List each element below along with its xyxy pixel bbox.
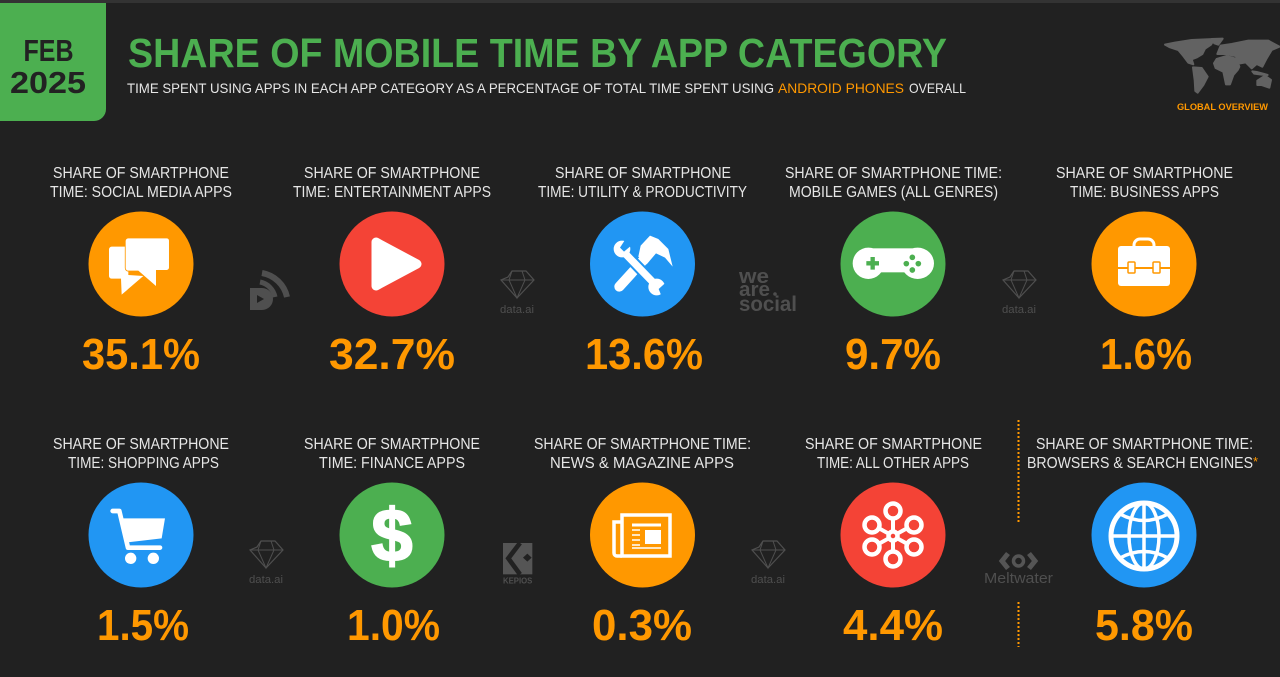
subtitle: ANDROID PHONES [778, 80, 904, 96]
category: finance: SHARE OF SMARTPHONE [304, 436, 480, 453]
category: business [1056, 165, 1233, 379]
category: business: 1.6% [1100, 330, 1192, 379]
category: utility: TIME: UTILITY & PRODUCTIVITY [538, 184, 747, 201]
category: news: 0.3% [592, 601, 692, 650]
source logo: meltwater: Meltwater [984, 570, 1053, 587]
source logo: data.ai [751, 541, 785, 586]
category: social media: SHARE OF SMARTPHONE [53, 165, 229, 182]
source logo: we are social: social [739, 293, 797, 316]
category: all other: 4.4% [843, 601, 943, 650]
world map [1165, 39, 1279, 93]
category: mobile games [785, 165, 1002, 379]
category: mobile games: 9.7% [845, 330, 941, 379]
category: shopping [53, 436, 229, 650]
category: finance: TIME: FINANCE APPS [319, 455, 465, 472]
category: browsers: 5.8% [1095, 601, 1193, 650]
source logo: rss D [250, 273, 287, 310]
category: browsers: BROWSERS & SEARCH ENGINES [1027, 455, 1253, 472]
source logo: kepios [503, 543, 533, 585]
category: entertainment: TIME: ENTERTAINMENT APPS [293, 184, 491, 201]
category: finance [304, 436, 480, 650]
source logo: data.ai: data.ai [751, 574, 785, 586]
category: business: SHARE OF SMARTPHONE [1056, 165, 1233, 182]
subtitle: TIME SPENT USING APPS IN EACH APP CATEGORY AS A PERCENTAGE OF TOTAL TIME SPENT USING [127, 80, 774, 96]
source logo: data.ai: data.ai [500, 304, 534, 316]
category: social media: TIME: SOCIAL MEDIA APPS [50, 184, 232, 201]
category: all other: TIME: ALL OTHER APPS [817, 455, 969, 472]
divider: dotted separator [1018, 420, 1020, 647]
region label: GLOBAL OVERVIEW [1177, 102, 1268, 113]
category: news [534, 436, 751, 650]
date badge: 2025 [10, 65, 86, 100]
category: shopping: TIME: SHOPPING APPS [68, 455, 219, 472]
category: news: NEWS & MAGAZINE APPS [550, 455, 734, 472]
date badge [0, 3, 106, 121]
category: entertainment [293, 165, 491, 379]
category: all other [805, 436, 982, 650]
date badge: FEB [24, 33, 74, 68]
category: browsers [1027, 436, 1258, 650]
source logo: data.ai [1002, 271, 1036, 316]
category: browsers: * [1253, 454, 1258, 469]
category: social media: 35.1% [82, 330, 200, 379]
category: entertainment: SHARE OF SMARTPHONE [304, 165, 480, 182]
source logo: meltwater [984, 554, 1053, 587]
category: utility [538, 165, 747, 379]
category: utility: 13.6% [585, 330, 703, 379]
category: mobile games: SHARE OF SMARTPHONE TIME: [785, 165, 1002, 182]
source logo: we are social: we [738, 266, 769, 288]
subtitle: OVERALL [909, 80, 966, 96]
category: entertainment: 32.7% [329, 330, 455, 379]
category: mobile games: MOBILE GAMES (ALL GENRES) [789, 184, 998, 201]
category: news: SHARE OF SMARTPHONE TIME: [534, 436, 751, 453]
title: SHARE OF MOBILE TIME BY APP CATEGORY [128, 30, 947, 76]
source logo: kepios: KEPIOS [503, 576, 533, 585]
source logo: data.ai [249, 541, 283, 586]
category: shopping: 1.5% [97, 601, 189, 650]
category: finance: $ [371, 494, 413, 577]
category: shopping: SHARE OF SMARTPHONE [53, 436, 229, 453]
category: social media [50, 165, 232, 379]
category: all other: SHARE OF SMARTPHONE [805, 436, 982, 453]
category: browsers: SHARE OF SMARTPHONE TIME: [1036, 436, 1253, 453]
source logo: data.ai: data.ai [249, 574, 283, 586]
source logo: we are social [738, 266, 797, 316]
category: finance: 1.0% [347, 601, 440, 650]
category: business: TIME: BUSINESS APPS [1070, 184, 1219, 201]
source logo: data.ai [500, 271, 534, 316]
category: utility: SHARE OF SMARTPHONE [555, 165, 731, 182]
source logo: data.ai: data.ai [1002, 304, 1036, 316]
source logo: we are social: are [739, 279, 770, 301]
